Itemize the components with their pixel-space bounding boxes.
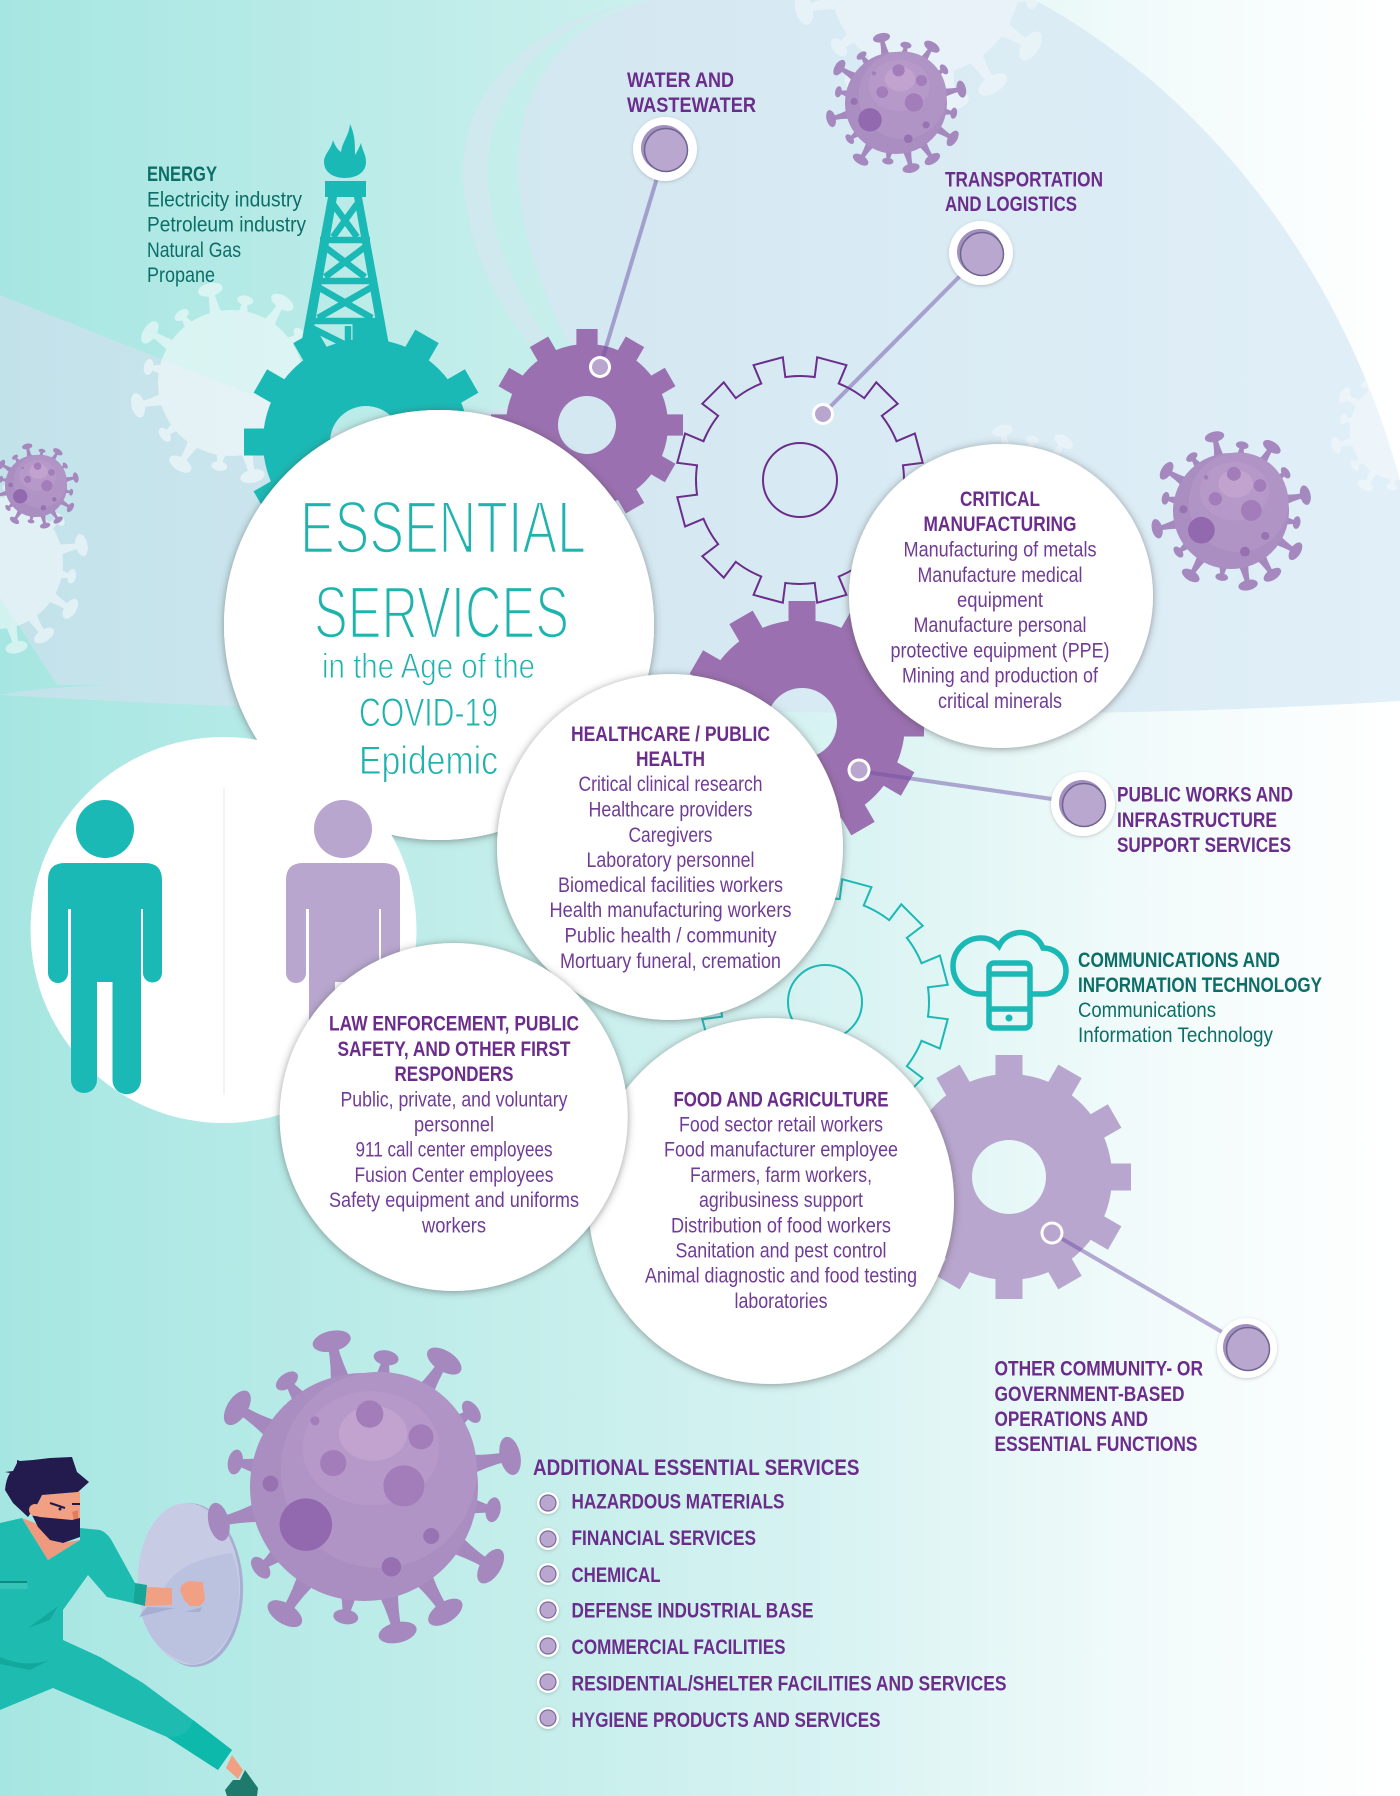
panel: food and agriculture: FOOD AND AGRICULTURE bbox=[674, 1088, 888, 1111]
icon: cloud and phone bbox=[953, 933, 1066, 1028]
title text: in the Age of the bbox=[322, 647, 535, 686]
cuff and forearm bbox=[133, 1583, 147, 1606]
callout: other community: OPERATIONS AND bbox=[994, 1408, 1148, 1431]
callout: public works: INFRASTRUCTURE bbox=[1117, 809, 1277, 832]
panel: healthcare / public health: Critical clinical research bbox=[578, 773, 762, 796]
panel: healthcare / public health: Public health / community bbox=[564, 924, 777, 948]
beard bbox=[32, 1515, 80, 1543]
panel: food and agriculture: Distribution of food workers bbox=[671, 1214, 891, 1237]
title text: SERVICES bbox=[314, 571, 569, 654]
list item: residential/shelter: RESIDENTIAL/SHELTER FACILITIES AND SERVICES bbox=[572, 1673, 1006, 1696]
text block: additional essential services bbox=[533, 1455, 1006, 1732]
hair bbox=[5, 1457, 89, 1517]
callout: transportation and logistics: AND LOGISTICS bbox=[945, 193, 1077, 216]
panel: law enforcement: personnel bbox=[414, 1114, 494, 1136]
gear: purple water bbox=[491, 329, 683, 521]
panel: law enforcement: 911 call center employees bbox=[356, 1139, 552, 1162]
text block: energy: Electricity industry bbox=[147, 188, 302, 212]
panel: food and agriculture: agribusiness support bbox=[699, 1189, 863, 1212]
list item: financial services: FINANCIAL SERVICES bbox=[572, 1527, 756, 1550]
gear: purple public works bbox=[680, 601, 924, 845]
illustration: shield bbox=[134, 1500, 247, 1670]
list item: commercial facilities bbox=[537, 1635, 786, 1659]
panel: law enforcement: RESPONDERS bbox=[394, 1063, 514, 1086]
callout: communications and IT: INFORMATION TECHNOLOGY bbox=[1078, 974, 1322, 997]
panel: law enforcement: SAFETY, AND OTHER FIRST bbox=[338, 1038, 571, 1061]
text block: energy bbox=[147, 163, 306, 287]
list item: hazardous materials: HAZARDOUS MATERIALS bbox=[572, 1490, 784, 1514]
leg bbox=[0, 1640, 232, 1770]
outline gear: teal bbox=[701, 878, 949, 1088]
callout: water and wastewater bbox=[589, 69, 756, 378]
panel: healthcare / public health: Healthcare providers bbox=[588, 798, 752, 822]
panel: food and agriculture: laboratories bbox=[734, 1290, 828, 1313]
callout: communications and IT bbox=[953, 933, 1322, 1047]
panel: food and agriculture bbox=[588, 1018, 954, 1384]
outline gear: purple bbox=[676, 356, 924, 604]
panel: food and agriculture: Food manufacturer employee bbox=[664, 1139, 898, 1162]
panel: healthcare / public health: Caregivers bbox=[628, 824, 712, 847]
list item: hygiene products: HYGIENE PRODUCTS AND SERVICES bbox=[572, 1709, 880, 1732]
icon: derrick bbox=[301, 181, 389, 346]
panel: food and agriculture: Animal diagnostic and food testing bbox=[645, 1265, 917, 1288]
panel: healthcare / public health: Health manufacturing workers bbox=[550, 899, 792, 922]
panel: healthcare / public health: HEALTHCARE / PUBLIC bbox=[571, 723, 770, 746]
callout: water and wastewater: WATER AND bbox=[627, 69, 734, 92]
title text: ESSENTIAL bbox=[300, 486, 586, 569]
panel: food and agriculture: Food sector retail workers bbox=[679, 1114, 883, 1136]
icon: small left virus bbox=[0, 442, 80, 529]
panel: law enforcement bbox=[280, 943, 628, 1291]
panel: law enforcement: workers bbox=[421, 1214, 486, 1237]
face bbox=[36, 1492, 80, 1530]
panel: healthcare / public health: Laboratory personnel bbox=[586, 849, 754, 872]
list item: chemical: CHEMICAL bbox=[572, 1564, 661, 1587]
title text bbox=[300, 486, 586, 783]
pocket bbox=[0, 1581, 28, 1589]
illustration: large virus bbox=[204, 1327, 524, 1647]
panel: healthcare / public health bbox=[497, 674, 843, 1020]
torso bbox=[0, 1518, 135, 1667]
text block: energy: Petroleum industry bbox=[147, 214, 306, 237]
panel: critical manufacturing: critical minerals bbox=[938, 690, 1062, 713]
icon: teal person bbox=[48, 800, 162, 1094]
panel: people circle bbox=[30, 410, 654, 1123]
text block: additional essential services: ADDITIONAL ESSENTIAL SERVICES bbox=[533, 1455, 860, 1480]
panel: critical manufacturing: Mining and production of bbox=[902, 665, 1098, 688]
icon: flame bbox=[324, 124, 366, 178]
text block: energy: ENERGY bbox=[147, 163, 217, 186]
panel: food and agriculture: Farmers, farm workers, bbox=[690, 1164, 872, 1187]
title text: Epidemic bbox=[359, 739, 498, 783]
callout: public works: SUPPORT SERVICES bbox=[1117, 834, 1291, 857]
callout: other community bbox=[994, 1222, 1277, 1456]
panel: critical manufacturing: protective equipment (PPE) bbox=[890, 640, 1110, 662]
panel: healthcare / public health: Mortuary funeral, cremation bbox=[560, 950, 781, 973]
panel: law enforcement: Fusion Center employees bbox=[354, 1164, 554, 1187]
callout: transportation and logistics: TRANSPORTATION bbox=[945, 168, 1103, 192]
callout: communications and IT: COMMUNICATIONS AND bbox=[1078, 949, 1280, 972]
list item: commercial facilities: COMMERCIAL FACILITIES bbox=[572, 1636, 786, 1659]
panel: law enforcement: Public, private, and voluntary bbox=[340, 1088, 568, 1111]
list item: hygiene products bbox=[537, 1707, 880, 1732]
callout: public works bbox=[848, 758, 1293, 857]
panel: healthcare / public health: Biomedical facilities workers bbox=[558, 874, 783, 897]
callout: transportation and logistics bbox=[812, 168, 1103, 425]
gear: teal energy with oil derrick bbox=[244, 124, 478, 504]
panel: critical manufacturing: CRITICAL bbox=[960, 488, 1040, 511]
panel: law enforcement: Safety equipment and uniforms bbox=[329, 1189, 579, 1212]
panel: healthcare / public health: HEALTH bbox=[636, 748, 705, 771]
icon: right virus bbox=[1150, 430, 1312, 592]
panel: critical manufacturing: Manufacture medical bbox=[918, 564, 1082, 587]
panel: title circle bbox=[30, 410, 654, 1123]
icon: lavender person bbox=[286, 800, 400, 1094]
callout: public works: PUBLIC WORKS AND bbox=[1117, 784, 1293, 807]
callout: other community: OTHER COMMUNITY- OR bbox=[994, 1358, 1203, 1381]
panel: food and agriculture: Sanitation and pest control bbox=[676, 1240, 886, 1262]
callout: other community: ESSENTIAL FUNCTIONS bbox=[994, 1433, 1198, 1456]
list item: chemical bbox=[537, 1563, 661, 1587]
ghost viruses bbox=[0, 0, 1400, 656]
callout: communications and IT: Communications bbox=[1078, 999, 1216, 1022]
gear: lavender other bbox=[930, 1055, 1131, 1299]
panel: critical manufacturing: equipment bbox=[957, 589, 1043, 612]
callout: water and wastewater: WASTEWATER bbox=[627, 94, 756, 117]
icon: top virus bbox=[825, 31, 968, 175]
text block: energy: Propane bbox=[147, 264, 215, 287]
panel: critical manufacturing: MANUFACTURING bbox=[924, 513, 1076, 536]
list item: defense industrial base: DEFENSE INDUSTRIAL BASE bbox=[572, 1599, 814, 1622]
callout: communications and IT: Information Technology bbox=[1078, 1024, 1273, 1047]
panel: critical manufacturing bbox=[849, 444, 1153, 748]
callout: other community: GOVERNMENT-BASED bbox=[994, 1383, 1184, 1406]
panel: law enforcement: LAW ENFORCEMENT, PUBLIC bbox=[329, 1013, 579, 1036]
illustration: doctor bbox=[0, 1457, 258, 1796]
panel: critical manufacturing: Manufacturing of metals bbox=[904, 538, 1096, 562]
neck bbox=[22, 1518, 80, 1560]
text block: energy: Natural Gas bbox=[147, 239, 241, 262]
panel: critical manufacturing: Manufacture personal bbox=[914, 614, 1086, 637]
title text: COVID-19 bbox=[359, 691, 498, 735]
